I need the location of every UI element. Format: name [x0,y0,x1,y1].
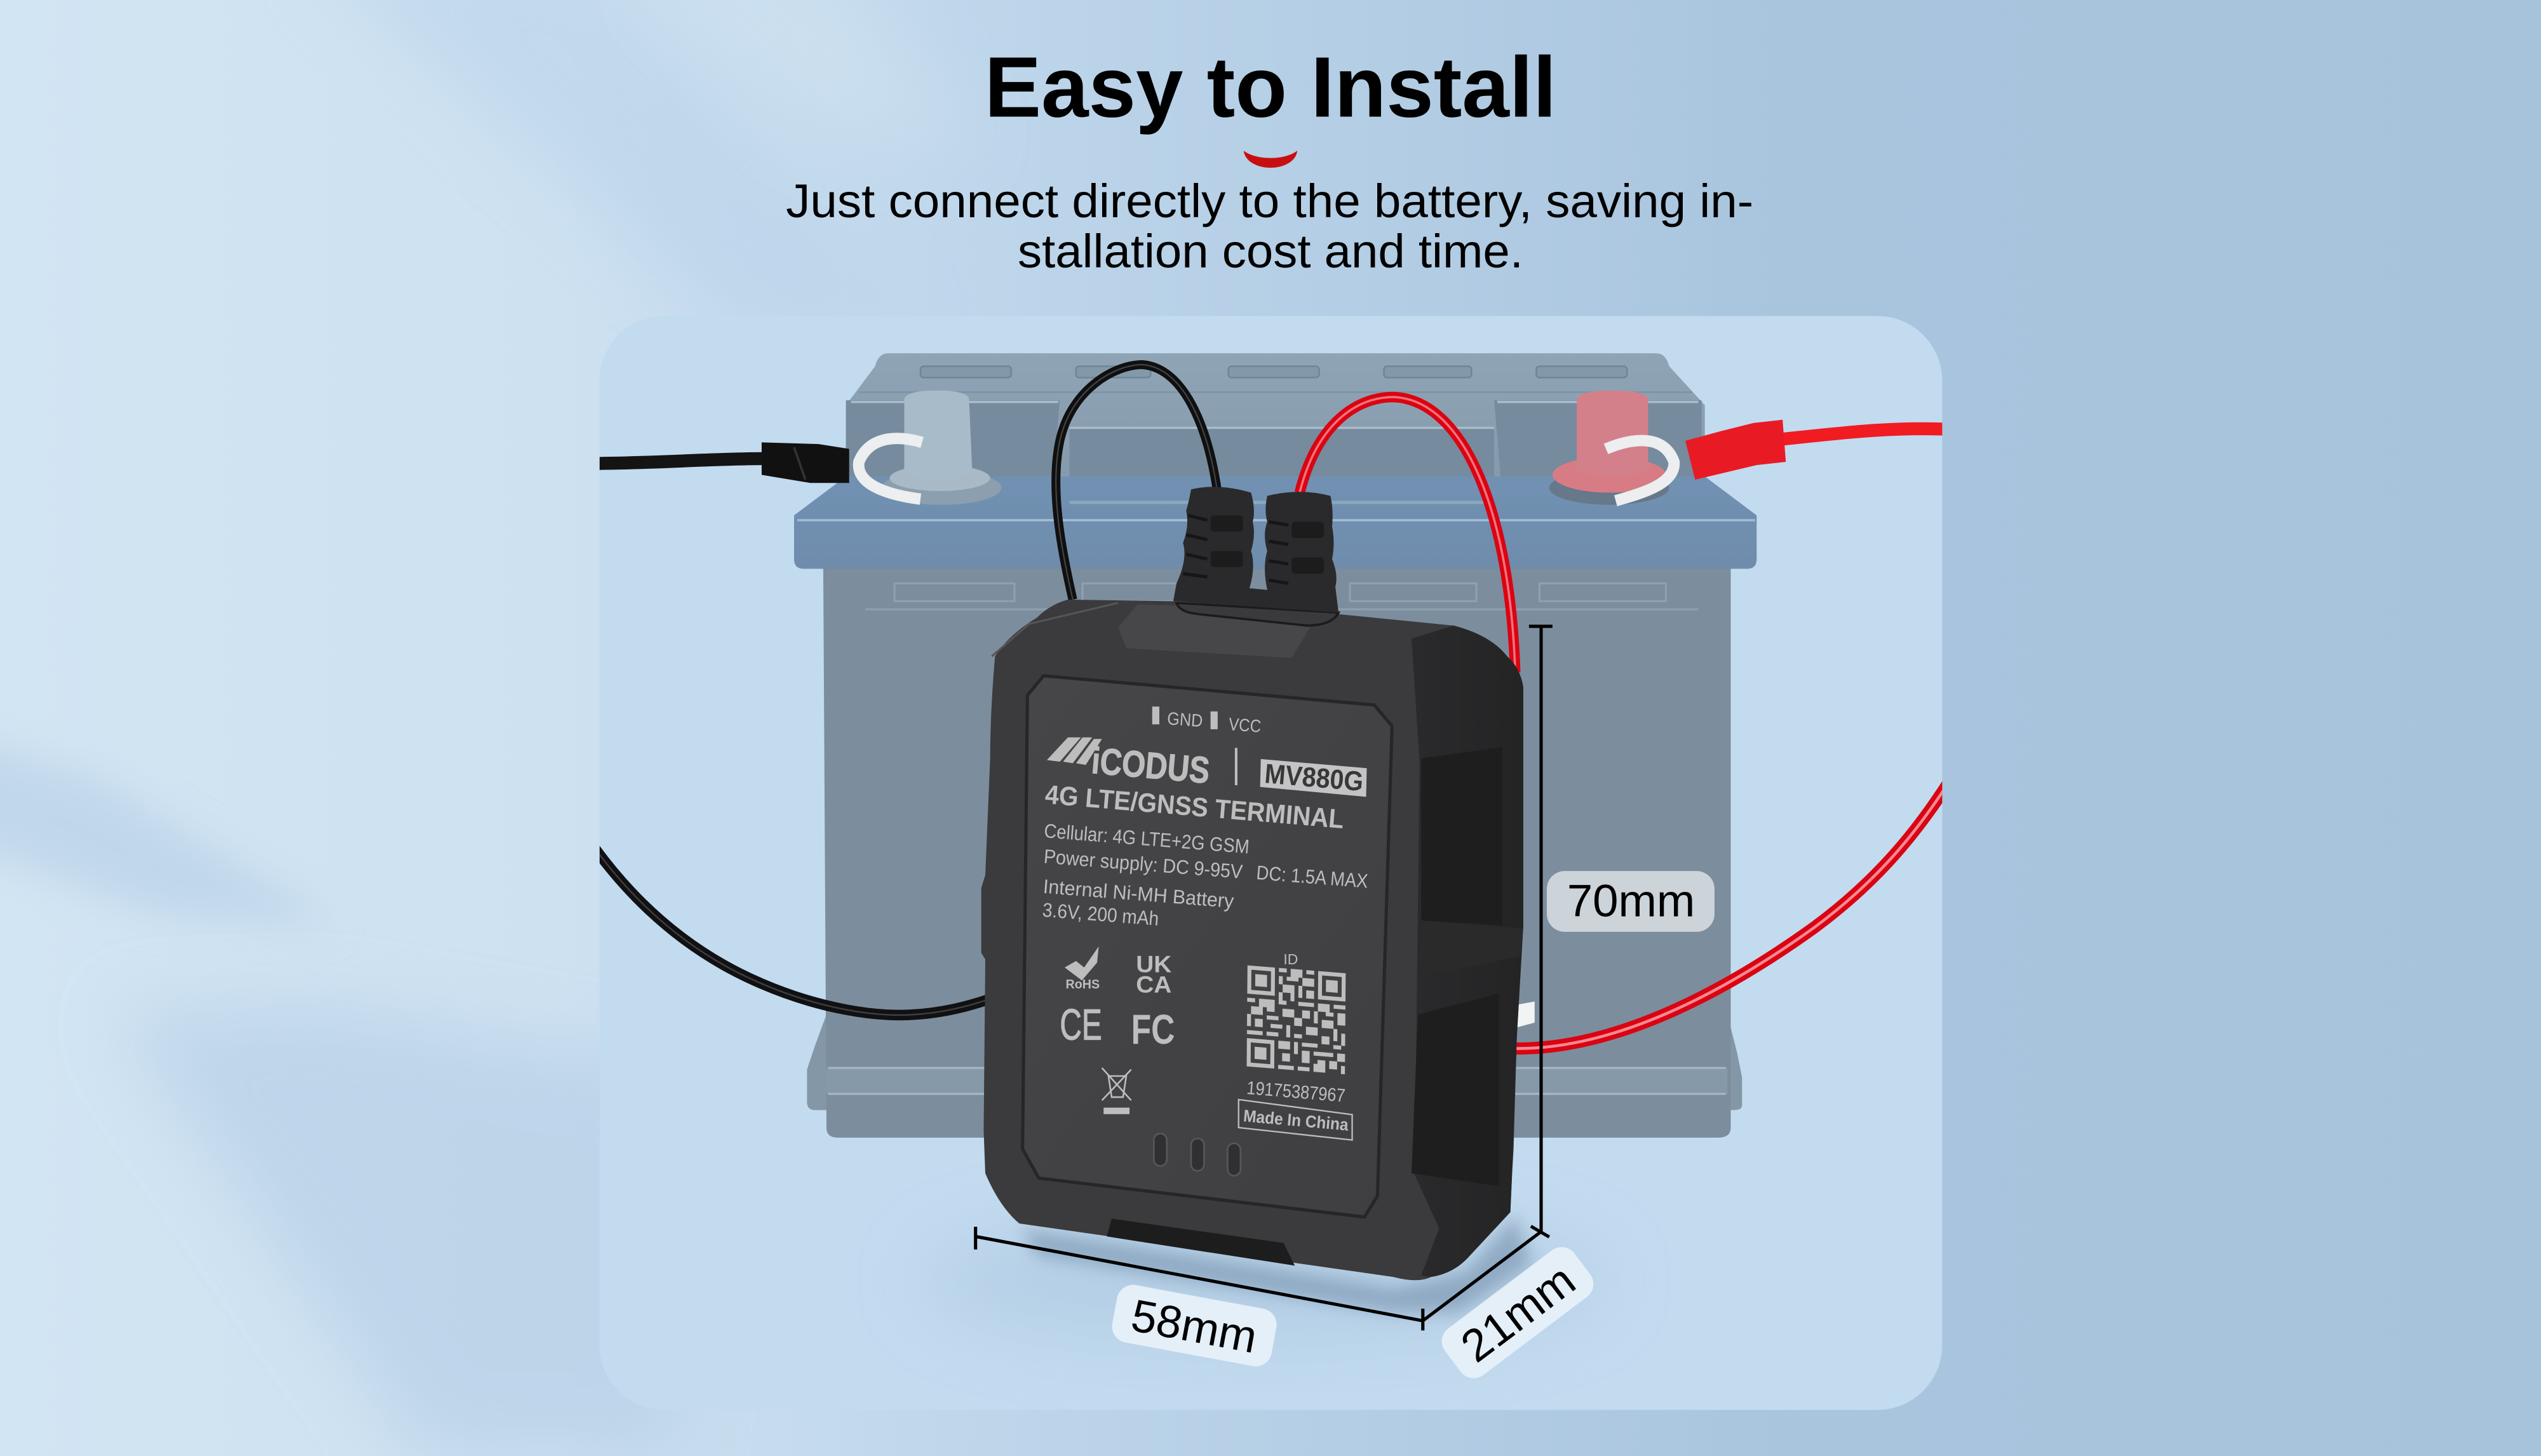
ID label: ID [1283,951,1298,967]
made in china box: Made In China [1243,1106,1350,1135]
made in china box [1239,1100,1352,1140]
icon: FC: FC [1131,1006,1175,1053]
battery blue lid band [794,476,1756,569]
terminal: negative post [882,391,1002,505]
device body [981,600,1523,1280]
title: Easy to Install [985,39,1556,135]
device bottom notch [1107,1218,1295,1265]
model badge: MV880G [1264,758,1365,797]
cable: red input to positive fork [1685,420,1951,480]
serial number: 19175387967 [1246,1077,1346,1107]
status LEDs [1154,1133,1241,1176]
cable: red lower [1514,781,1950,1049]
specifications [1042,819,1369,930]
device side [1412,626,1523,1277]
device label print [1042,706,1369,1176]
ground shade [967,1236,1544,1339]
icon: CE: CE [1060,1000,1102,1049]
label: 70mm [1547,871,1715,932]
cable: red loop [1300,397,1515,673]
battery lid top [846,353,1705,486]
icon: UKCA [1136,952,1172,998]
QR code [1246,966,1345,1074]
subtitle: stallation cost and time. [1018,225,1523,278]
label: 58mm: 58mm [1128,1290,1261,1363]
icon: UKCA: CA [1136,972,1171,998]
polarity markers: GND [1166,708,1203,731]
device shadow [1021,1215,1532,1312]
polarity markers [1152,706,1262,736]
battery recessed faces [846,400,1702,502]
icon: RoHS: RoHS [1066,978,1100,992]
brand logo [1047,738,1211,792]
fork tip behind device [1517,1002,1535,1027]
icon: red smile accent [1244,151,1297,168]
label: 70mm: 70mm [1567,876,1695,927]
specifications: Power supply: DC 9-95V [1043,846,1244,883]
label: 58mm [1109,1282,1279,1369]
specifications: DC: 1.5A MAX [1255,861,1369,893]
fork: negative [859,438,922,499]
label: 21mm [1436,1241,1600,1385]
brand logo: iCODUS [1090,740,1211,792]
subtitle [786,175,1753,278]
cable: black loop [1056,365,1217,600]
battery [794,353,1756,1138]
product name: 4G LTE/GNSS TERMINAL [1044,779,1345,834]
icon: RoHS [1065,947,1100,992]
cable: black input to negative fork [591,442,849,483]
icon: recycling bin [1102,1068,1131,1114]
specifications: Cellular: 4G LTE+2G GSM [1043,819,1250,858]
panel: product scene [591,316,1951,1410]
device: GPS terminal [981,600,1523,1280]
terminal: positive post [1549,391,1669,505]
device top tab [1118,605,1321,658]
battery feet [807,1014,1742,1110]
specifications: Internal Ni-MH Battery [1042,875,1235,912]
specifications: 3.6V, 200 mAh [1042,899,1160,930]
cable boots [1173,487,1338,626]
fork: positive [1606,441,1674,501]
device side insets [1412,747,1502,1186]
label: 21mm: 21mm [1452,1255,1584,1372]
polarity markers: VCC [1228,714,1262,736]
icon: UKCA: UK [1136,952,1172,978]
dimension lines [976,626,1553,1330]
device plate [1023,676,1392,1217]
battery body [823,567,1730,1138]
cable: black lower [593,846,992,1015]
subtitle: Just connect directly to the battery, saving in- [786,175,1753,227]
